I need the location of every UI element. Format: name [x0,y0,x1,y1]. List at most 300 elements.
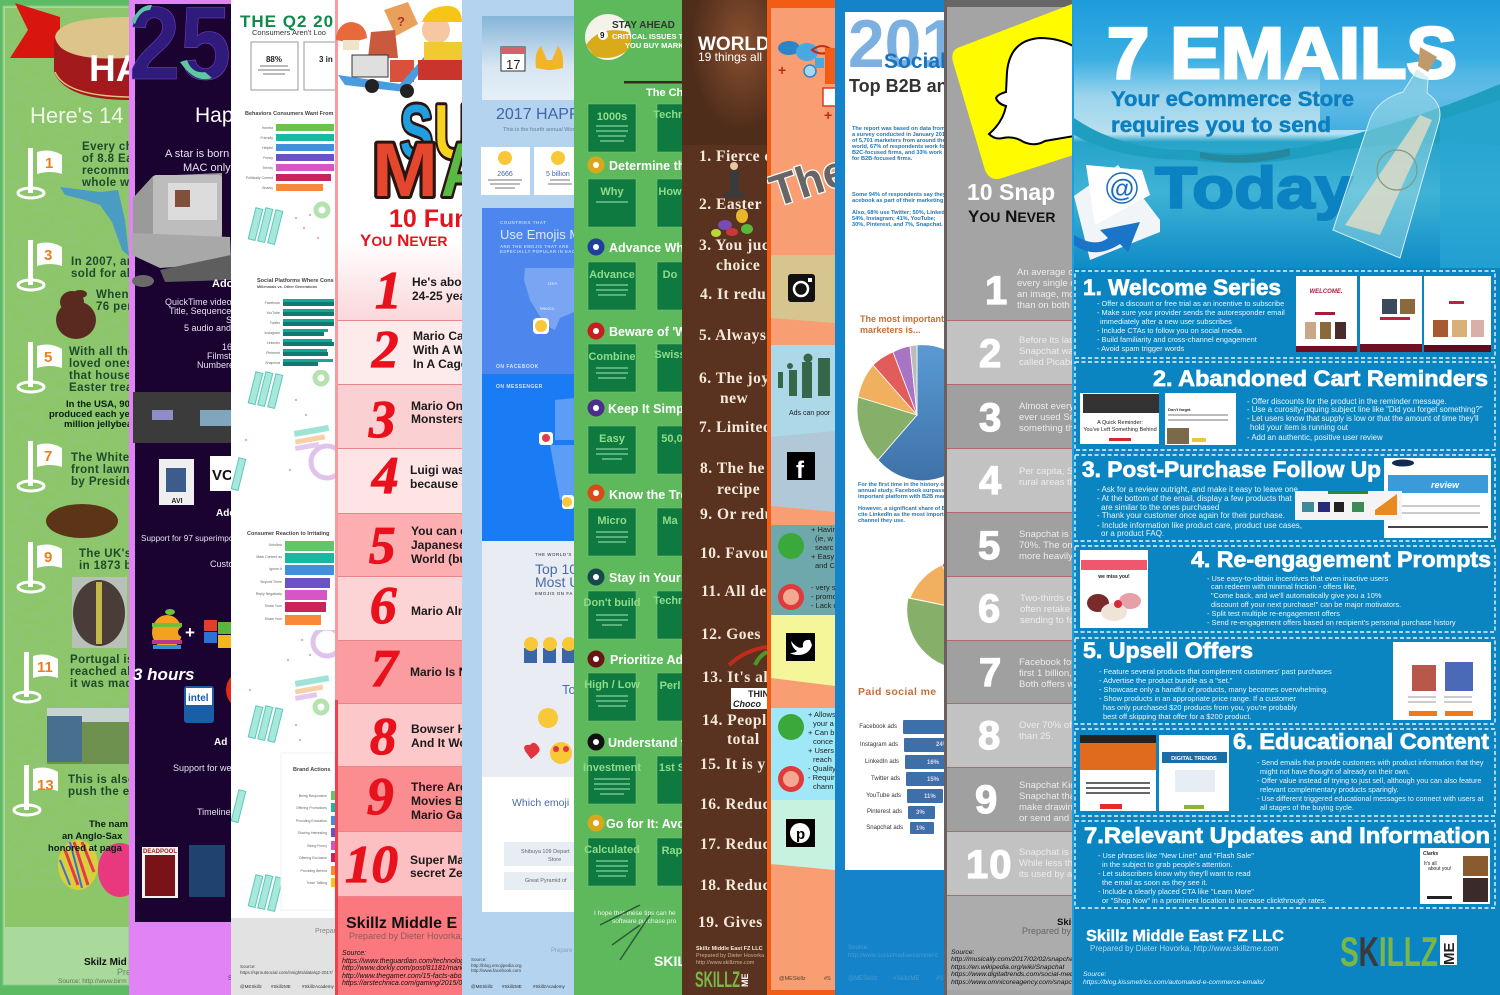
logo: Super Mario: M [372,128,438,213]
block: audience [771,345,835,437]
subtitle [1111,88,1354,137]
text block: facts: an Anglo-Sax [62,831,123,842]
footer: credits and logo: ME [740,974,750,987]
footer: source and handles: http://www.socialmediaexaminer.c [848,953,938,959]
footer: credits and logo: Skillz Middle East FZ LLC [696,946,763,952]
section 4: Re-engagement Prompts: can redeem with minimal friction - offers like, [1211,582,1357,591]
section 7: Relevant Updates: in the subject to grab people's attention. [1102,860,1232,869]
logo: Skillz ME: SKILLZ [1340,928,1438,975]
list: 19 things: 2. Easter [699,196,762,213]
panel: top 10 emojis: THE WORLD'S [535,552,572,557]
heading: STAY AHEAD [612,20,675,31]
bar chart: behaviors consumers want: Friendly [261,136,273,140]
bar chart: social platforms: LinkedIn [267,341,280,345]
footer: source: https://blog.kissmetrics.com/automated-e-commerce-emails/ [1083,979,1265,986]
box titles: Investment [583,762,641,774]
bar chart: brand actions [281,753,335,910]
section 1: Welcome Series: - Include CTAs to follow you on social media [1097,326,1243,335]
block: Twitter pros and cons [771,708,836,800]
text block: intro: MAC only [183,162,231,174]
text block: analysis [858,482,961,524]
icon: chocolate bunny [56,290,96,339]
section 1: Welcome Series: WELCOME. [1310,289,1343,295]
bar chart: social platforms: Pinterest [266,351,280,355]
bar chart: consumer reaction: Mark Content as [256,555,282,559]
bar chart: social platforms: Twitter [270,321,281,325]
list: facts: make drawin [1019,802,1072,813]
heading: 10 Snapchat facts: YOU NEVER [968,207,1055,226]
footer: credits: Prepare [551,948,573,954]
box titles: Calculated [584,844,640,856]
text block: report overview: of 5,701 marketers from around the [852,138,944,144]
footer: credits and sources: https://en.wikipedia.org/wiki/Snapchat [951,964,1065,971]
block: Pinterest [771,800,835,870]
footer: source and handles: Source: [848,945,869,951]
icon: cue sticks [600,905,650,960]
section 6: Educational Content: relevant complementary products sparingly. [1260,785,1398,794]
heading: YOU BUY MARK [625,41,682,50]
text block: features 1 [165,278,244,370]
panel: 7 Emails strip [1072,0,1500,995]
list: numbers and facts: 3 [368,391,396,449]
box titles: Micro [597,515,627,527]
footer: credits and sources: Skillz Middle E [346,915,457,932]
list: numbers: 2 [979,332,1001,376]
box titles: High / Low [584,679,640,691]
section 7: Relevant Updates: - Include a clearly placed CTA like "Learn More" [1098,887,1254,896]
card: 2666: 2666 [497,171,513,178]
list: facts: first 1 billion, [1019,668,1072,679]
bar chart: behaviors consumers want: Funny [263,156,273,160]
box titles: Rap [662,845,682,857]
footer: credits and sources: Source: [342,950,366,957]
list: numbers and facts [345,262,470,894]
image: editing software screenshot [133,392,231,443]
icon: plus sign: + [185,623,195,642]
footer: credits: #SkillzAcademy [302,984,335,989]
list: 19 things: 15. It is y [700,756,766,773]
footer: credits [471,948,573,989]
heading: 10 fun facts: YOU NEVER [360,231,447,250]
panel: Easter facts infographic strip [0,0,129,995]
icon: golf flags: 3 [44,247,52,264]
list: 19 things [698,148,774,931]
text block: features 2 [141,508,242,569]
list: numbers and facts: 10 [345,836,398,894]
header image: sky and sea [1074,0,1500,268]
section 1: Welcome Series: - Offer a discount or free trial as an incentive to subscribe [1097,299,1284,308]
list: numbers: 5 [978,524,1000,568]
text block: intro [165,148,231,174]
bar chart: social platforms: Millennials vs. Other Generations [257,285,317,289]
bar chart: social platforms: Snapchat [265,361,280,365]
bar chart: behaviors consumers want: Behaviors Consumers Want From [245,111,334,117]
list: numbers [966,269,1012,887]
section 1: Welcome Series: 1. Welcome Series [1083,275,1281,300]
list: facts: Per capita, S [1019,466,1072,477]
list: numbers and facts: 5 [369,517,396,575]
section 4: Re-engagement Prompts: we miss you! [1097,574,1130,580]
text block: features 3: Ad [214,737,227,748]
footer: source and handles: #SkillzME [893,976,919,982]
icon: AVI file [159,459,194,505]
bar chart: paid social ads: 11% [924,794,936,800]
section 6: Educational Content: - Send emails that provide customers with product information that they [1257,758,1484,767]
section 4: Re-engagement Prompts: - Send re-engagement offers based on recipient's personal purchase history [1207,618,1456,627]
bar chart: paid social ads: 1% [916,826,925,832]
heading: 10 Snapchat facts [967,179,1055,226]
section 6: Educational Content: might not have thought of already on their own. [1260,767,1410,776]
title: Today: Today [1155,156,1353,221]
subtitle: Your eCommerce Store [1111,88,1354,111]
icon: Super Mario Maker artwork [336,2,462,98]
section 6: Educational Content: - Use different triggered educational messages to connect with users at [1257,794,1483,803]
footer: credits: http://blog.emojipedia.org [471,963,522,968]
grid: boxes [588,104,687,886]
bar chart: consumer reaction: Share Your [265,604,283,608]
row backgrounds [947,320,1072,990]
section 7: Relevant Updates: - Use phrases like "New Line!" and "Flash Sale" [1098,851,1254,860]
icon: chili peppers [729,647,767,665]
image: think chocolate: Choco [733,699,762,709]
footer: credits and sources: Source: [951,949,975,956]
list: 19 things: 11. All de [701,583,767,600]
box titles: Combine [588,351,636,363]
panel: poll: Store [548,857,561,863]
section 4: Re-engagement Prompts: "Come back, and we'll automatically give you a 10% [1211,591,1382,600]
bar chart: behaviors consumers want: Snarky [262,186,273,190]
closing text: software purchase pro [612,918,677,925]
text block: report overview [851,126,959,228]
icon: golf flags: 5 [44,349,52,366]
section 4: Re-engagement Prompts [1080,547,1491,628]
section 4: Re-engagement Prompts: discount off your next purchase!" can be major motivators. [1211,600,1401,609]
list: numbers and facts: 6 [370,577,397,635]
block: Twitter pros and cons: + Allows [808,710,835,719]
card: 2666 [481,147,530,195]
section 3: Post-Purchase Follow Up: - Thank your customer once again for their purchase. [1097,511,1285,520]
panel: on Facebook map: USA [548,281,557,286]
section 7: Relevant Updates: It's all [1424,861,1437,867]
text: 3 hours: 3 hours [133,665,194,684]
section 5: Upsell Offers: - Show products in an appropriate price range. If a customer [1099,694,1296,703]
section 2: Abandoned Cart Reminders: Don't forget [1168,407,1191,412]
footer: credits: https://sproutsocial.com/insights/data/q2-2017/ [240,970,334,975]
icon: nine ball [585,14,631,60]
list: facts: something th [1019,423,1072,434]
bar chart: social platforms: Instagram [264,331,280,335]
footer: credits: @MESkillz [471,984,494,989]
list: numbers and facts: 4 [371,447,398,505]
text block: report overview: for B2B-focused firms. [852,156,913,162]
icon: message in a bottle [1333,47,1440,258]
list: facts: than 25. [1019,731,1053,742]
block: Pinterest: p [796,826,805,843]
footer: credits: Skilz Mid [84,957,127,968]
list: 19 things: 4. It redu [700,286,766,303]
section 2: Abandoned Cart Reminders: hold your item is running out [1250,423,1349,432]
bar chart: paid social ads: YouTube ads [866,793,901,799]
section 2: Abandoned Cart Reminders: - Offer discounts for the product in the reminder message. [1247,397,1447,406]
box titles: Don't build [584,597,640,609]
footer: source and handles: #S [936,976,943,982]
list: facts: often retake [1020,604,1070,615]
text block: facts: When [96,289,129,301]
panel: on Facebook map: ON FACEBOOK [496,364,539,370]
section 7: Relevant Updates: Clarks [1423,851,1439,857]
section 3: Post-Purchase Follow Up: are similar to the ones purchased [1101,503,1219,512]
box titles: Do [663,269,678,281]
text block: facts: In the USA, 90 [66,399,129,410]
bar chart: brand actions: Providing Education [296,819,327,823]
bar chart: paid social ads: 3% [916,810,925,816]
bar chart: brand actions: Offering Exclusive [299,856,327,860]
text block: report overview: The report was based on data from [852,126,944,132]
section 5: Upsell Offers: - Advertise the product bundle as a "set." [1099,676,1233,685]
list: numbers: 8 [978,714,1000,758]
section 1: Welcome Series: - Build familiarity and cross-channel engagement [1097,335,1257,344]
list: numbers: 9 [975,778,997,822]
footer: credits: @MESkillz [240,984,263,989]
bar chart: paid social ads: Snapchat ads [866,825,903,831]
section 6: Educational Content: 6. Educational Content [1233,729,1490,754]
box titles: 1000s [597,111,627,123]
icon: golf flags: 1 [45,155,53,172]
bar chart: behaviors consumers want: Honest [262,126,273,130]
list: facts: An average o [1017,267,1072,278]
block: Facebook pros and cons: - very s [811,583,835,592]
list: numbers: 6 [978,587,1000,631]
icon: decorated eggs [58,840,142,897]
icon: golf flags [14,148,62,815]
section 5: Upsell Offers: - Feature several products that complement customers' past purchases [1099,667,1332,676]
list: numbers: 7 [979,651,1001,695]
list: facts: its used by a [1019,869,1072,880]
panel: Super Mario facts strip [335,0,462,995]
panel: software purchase strip [574,0,682,995]
bar chart: brand actions: Brand Actions [293,767,330,773]
text block: report overview: 30%, Pinterest, and 7%, Snapchat. [852,222,943,228]
text block: facts: honored at paga [48,843,123,854]
bar chart: brand actions: Offering Promotions [296,806,327,810]
block: Twitter pros and cons: reach [813,755,832,764]
block: Twitter pros and cons: - Requir [808,773,835,782]
panel: Snapchat facts strip [944,0,1072,995]
bar chart: consumer reaction: Boycott Them [260,580,282,584]
list: 19 things: recipe [717,481,760,498]
logo: Super Mario: S [400,90,433,175]
header image [482,16,574,100]
bar chart: consumer reaction: Consumer Reaction to Irritating [247,531,330,537]
footer: source and handles [848,945,943,982]
headings with billiard balls [588,156,696,832]
bar chart: paid social ads: LinkedIn ads [865,759,899,765]
text block: report overview: 54%, Instagram; 41%, YouTube; [852,216,936,222]
panel: social ads strip [767,0,835,995]
icon: chocolate pile [46,504,118,538]
footer: credits: Source: [471,957,487,962]
panel: Q2 2017 social index strip [231,12,335,995]
bar chart: consumer reaction: Ignore It [269,567,282,571]
block: Twitter pros and cons: + Can b [808,728,834,737]
title: 7 EMAILS: 7 EMAILS [1107,14,1457,94]
icon: Windows flag [204,620,231,648]
title [240,12,344,37]
bar chart: paid social ads: Facebook ads [859,724,897,730]
image: Avatar poster [189,845,225,897]
icon: Florida map [60,187,129,256]
icon: red ribbon banner [10,3,142,100]
bar chart: social platforms: Facebook [265,301,280,305]
icon: golf flags: 13 [37,777,54,794]
section 3: Post-Purchase Follow Up: review [1431,480,1460,490]
bar chart: brand actions: Providing Behind [301,869,327,873]
bar chart: brand actions: Being Funny [307,844,327,848]
panel: poll: Shibuya 109 Depart [521,849,570,855]
box titles: Advance [589,269,635,281]
icon: golf flags: 9 [44,549,52,566]
block: Facebook: f [796,457,805,484]
section 7: Relevant Updates: about you! [1428,866,1451,872]
card: 5 billion [534,147,574,195]
list: 19 things: new [720,390,748,407]
header image: 17 [506,57,520,72]
list: 19 things: 13. It's al [702,669,767,686]
heading: most important: marketers is... [860,325,921,335]
callout: 88%: 88% [266,55,282,64]
section 4: Re-engagement Prompts: 4. Re-engagement Prompts [1191,547,1491,572]
section 4: Re-engagement Prompts: - Use easy-to-obtain incentives that even inactive users [1207,574,1388,583]
bar chart: consumer reaction: Unfollow [269,543,282,547]
icon: marketing cluster: + [824,107,832,123]
bar chart: consumer reaction: Share Your [265,617,283,621]
bar chart: consumer reaction [235,518,335,630]
heading: 10 Snapchat facts: 10 Snap [967,179,1055,205]
section 2: Abandoned Cart Reminders: You've Left Something Behind [1083,427,1157,433]
heading: most important: The most important [860,314,944,324]
title: Consumers Aren't Loo [252,28,326,37]
panel: 25 years of Premiere strip [129,0,231,995]
section 3: Post-Purchase Follow Up: - Include information like product care, product use cases, [1097,521,1302,530]
footer: source and handles: @MESkillz [848,976,877,982]
image: giant egg photo [72,577,127,648]
footer: source [1083,971,1265,986]
section 2: Abandoned Cart Reminders: - Add an authentic, positive user review [1247,433,1383,442]
card: 5 billion: 5 billion [546,171,570,178]
icon: email envelope: @ [1110,175,1134,203]
icon: Intel Core 2 Duo logo [184,686,214,723]
icon: VC logo [210,456,233,491]
section 7: Relevant Updates: the email as soon as they see it. [1102,878,1208,887]
icon: marketing cluster: + [778,62,786,78]
panel: 2017 social media marketing strip [835,0,944,995]
list: facts: While less th [1019,858,1072,869]
section 1: Welcome Series: - Make sure your provider sends the autoresponder email [1097,308,1285,317]
list: numbers and facts: 9 [367,768,394,826]
section 3: Post-Purchase Follow Up [1082,457,1491,538]
panel: on Facebook map [482,208,587,374]
text block: analysis: channel they use. [858,518,905,524]
list: 19 things: 14. Peopl [702,712,767,729]
panel: on Messenger map: ON MESSENGER [496,384,543,390]
block: Facebook [771,431,835,512]
block: Facebook pros and cons: and C [815,561,835,570]
closing text [594,910,677,925]
block: audience: Ads can poor [789,410,831,417]
footer: handles: #S [824,976,831,982]
footer: company name: Skillz Middle East FZ LLC [1086,928,1284,945]
block: Twitter pros and cons: chann [813,782,833,791]
block: Instagram [771,255,835,323]
panel: on Facebook map: AND THE EMOJIS THAT ARE [500,244,569,249]
icon: man pointing [722,162,746,198]
block: Twitter [771,615,835,686]
text block: facts [48,141,146,854]
section 5: Upsell Offers: - Showcase only a handful of products, many becomes overwhelming. [1099,685,1328,694]
footer: credits: Source: http://www.birm [58,978,127,985]
panel: poll: Which emoji [512,797,569,809]
decorative confetti [231,204,343,911]
bar chart: behaviors consumers want: Trendy [262,166,273,170]
pie chart: most important platform [857,345,985,481]
list: 19 things: 19. Gives [698,914,763,931]
image: Deadpool poster: DEADPOOL [143,849,177,855]
section 5: Upsell Offers: has only purchased $20 products from you, you're probably [1103,703,1297,712]
section 7: Relevant Updates: 7.Relevant Updates and Information [1084,823,1490,848]
footer: credits: #SkillzME [502,984,522,989]
text block: intro: A star is born [165,148,229,160]
bar chart: behaviors consumers want: Politically Correct [246,176,273,180]
section 7: Relevant Updates: - Let subscribers know why they'll want to read [1098,869,1251,878]
section 3: Post-Purchase Follow Up: - At the bottom of the email, display a few products that [1097,494,1293,503]
icon: AVI file: AVI [171,498,183,505]
panel: poll [482,777,574,912]
block: Twitter pros and cons: your a [813,719,835,728]
section 7: Relevant Updates [1084,823,1490,905]
section 6: Educational Content: all stages of the buying cycle. [1260,803,1354,812]
icon: email envelope [1074,165,1160,260]
list: facts: Over 70% of [1019,720,1072,731]
title [698,34,770,64]
bar chart: paid social ads: Instagram ads [860,742,898,748]
list: facts: more heavily [1019,551,1072,562]
box titles: Perl [660,680,680,692]
section 3: Post-Purchase Follow Up: 3. Post-Purchase Follow Up [1082,457,1381,482]
dashed section frames [1075,271,1495,908]
icon: Apple logo [152,609,188,649]
heading: 10 fun facts [360,205,470,250]
icon: Intel Core 2 Duo logo: intel [188,693,209,704]
section 3: Post-Purchase Follow Up: - Ask for a review outright, and make it easy to leave one. [1097,485,1300,494]
section 2: Abandoned Cart Reminders [1080,366,1488,445]
section 1: Welcome Series: immediately after a new user subscribes [1100,317,1232,326]
box titles: Easy [599,433,626,445]
block: Twitter pros and cons: conce [813,737,833,746]
block: Facebook pros and cons: searc [815,543,834,552]
list: numbers and facts: 1 [375,262,402,320]
logo: Skillz ME: ME [1441,942,1458,965]
footer: credits [231,918,340,995]
bar chart: paid social ads: Pinterest ads [867,809,902,815]
icon: nine ball: 9 [600,31,605,40]
panel: World Emoji Day strip [462,0,574,995]
list: numbers: 4 [979,459,1002,503]
footer: credits and sources [342,915,476,987]
list: 19 things: 12. Goes [701,626,761,643]
footer: credits and sources [951,917,1081,986]
footer: credits: #SkillzME [271,984,291,989]
footer: company name [1086,928,1284,953]
